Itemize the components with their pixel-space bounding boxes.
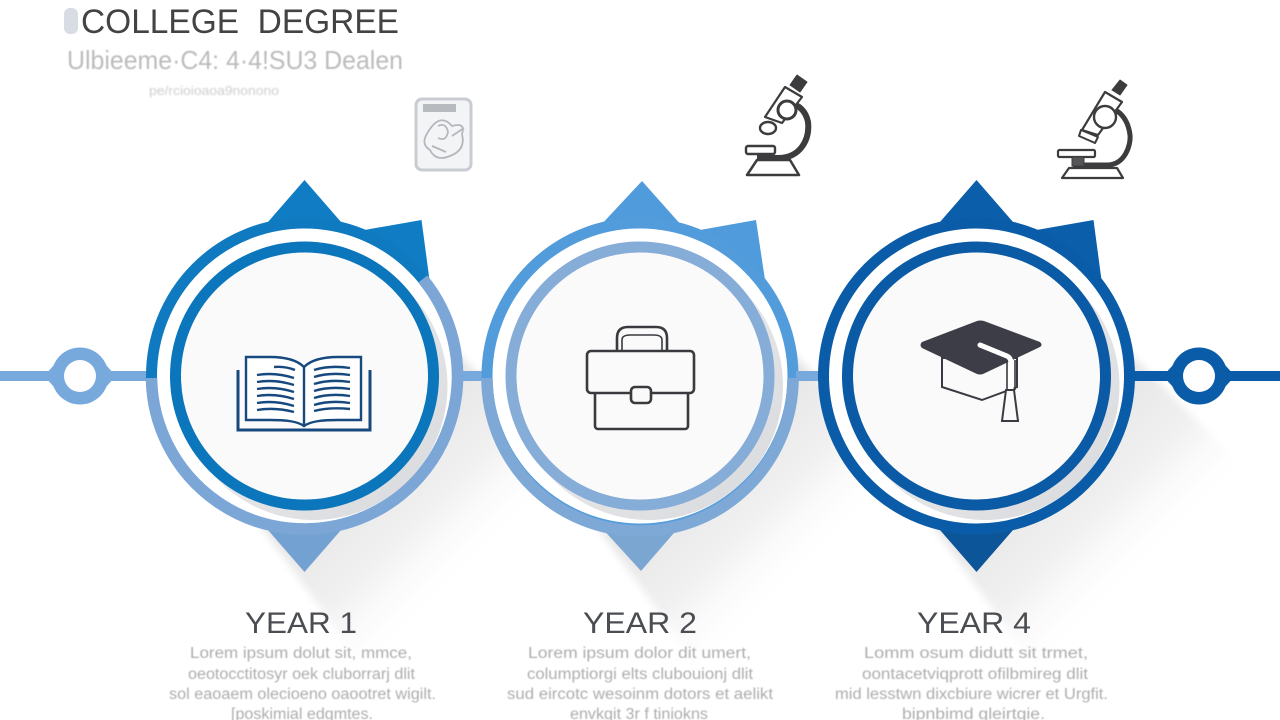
timeline line: right segment — [1134, 371, 1280, 381]
text block: year 2 — [507, 645, 774, 720]
side marker — [364, 220, 430, 280]
text block: year 2: columptiorgi elts clubouionj dlit — [527, 666, 754, 683]
side marker — [1036, 220, 1102, 280]
text block: year 4: oontacetviqprott ofilbmireg dlit — [862, 666, 1089, 683]
text block: year 2: sud eircotc wesoinm dotors et aelikt — [507, 686, 774, 703]
long shadow — [216, 288, 602, 708]
bottom marker — [936, 526, 1016, 572]
inner disc shadow — [214, 296, 448, 520]
small caption: pe/rcioioaoa9nonono — [149, 83, 279, 98]
outer ring light arc — [152, 279, 457, 529]
top marker — [936, 180, 1016, 226]
step 2: year 2 circle — [481, 181, 841, 624]
top marker — [264, 180, 344, 226]
side marker — [700, 220, 765, 280]
outer ring — [487, 223, 793, 529]
text block: year 4: mid lesstwn dixcbiure wicrer et Urgfit. — [835, 686, 1108, 703]
long shadow — [888, 288, 1274, 708]
connector 1 to 2 — [462, 371, 484, 381]
heading: year 1: YEAR 1 — [245, 607, 357, 640]
long shadow — [552, 288, 938, 708]
outer ring — [824, 223, 1130, 529]
inner ring — [511, 247, 769, 505]
timeline line: left segment — [0, 371, 150, 381]
icon: open book — [238, 357, 370, 430]
connector 2 to 3 — [796, 371, 820, 381]
heading: year 2: YEAR 2 — [583, 607, 697, 640]
inner disc shadow — [549, 296, 783, 520]
text block: year 1: oeotocctitosyr oek cluborrarj dlit — [188, 666, 416, 683]
left node — [44, 348, 116, 404]
outer ring — [152, 223, 458, 529]
right node — [1163, 348, 1235, 404]
inner disc shadow — [886, 296, 1120, 520]
icon: faded device — [416, 99, 471, 170]
icon: briefcase — [587, 327, 694, 429]
bottom marker — [264, 526, 344, 572]
inner ring — [848, 247, 1106, 505]
heading: year 4: YEAR 4 — [917, 607, 1031, 640]
text block: year 4 — [835, 645, 1108, 720]
text block: year 1 — [169, 645, 436, 720]
text block: year 1: Lorem ipsum dolut sit, mmce, — [190, 645, 412, 662]
outer ring light arc — [487, 378, 793, 531]
icon: graduation cap — [920, 320, 1042, 421]
text block: year 2: Lorem ipsum dolor dit umert, — [528, 645, 751, 662]
bottom marker — [600, 526, 680, 571]
top marker — [600, 181, 682, 226]
title marker — [64, 8, 78, 34]
title: COLLEGE DEGREE — [81, 3, 399, 41]
icon: microscope 2 — [1058, 80, 1130, 178]
text block: year 4: Lomm osum didutt sit trmet, — [864, 645, 1088, 662]
inner ring — [176, 247, 434, 505]
text block: year 1: sol eaoaem olecioeno oaootret wigilt. — [169, 686, 436, 703]
subtitle: Ulbieeme·C4: 4·4!SU3 Dealen — [67, 45, 403, 75]
step 3: year 4 circle — [818, 180, 1202, 624]
step 1: year 1 circle — [146, 180, 504, 624]
icon: microscope 1 — [746, 75, 808, 175]
